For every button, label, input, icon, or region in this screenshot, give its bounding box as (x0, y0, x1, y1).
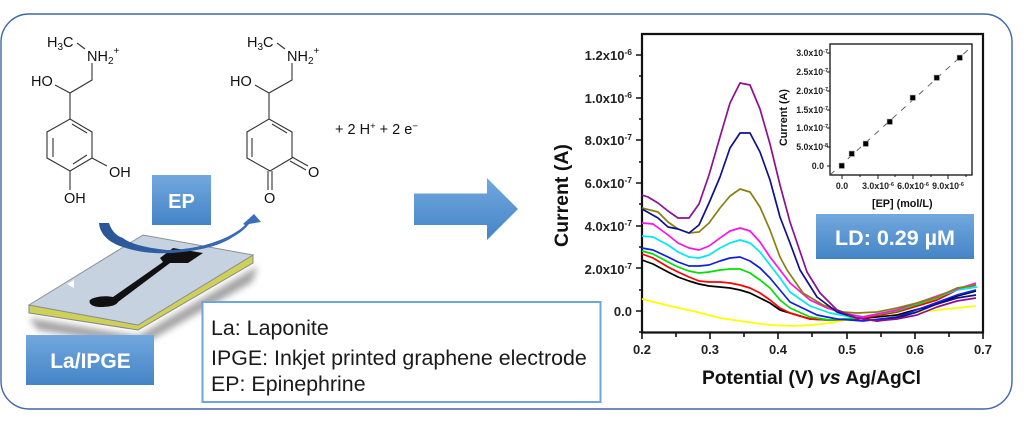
inset data points (839, 55, 962, 168)
molecule: epinephrine: + (114, 46, 120, 57)
voltammogram chart (551, 34, 992, 389)
molecule: epinephrine: C (63, 35, 74, 51)
y tick labels: -7 (624, 218, 632, 228)
y tick labels: 0.0 (614, 304, 632, 319)
curves (642, 83, 977, 326)
x tick labels: 0.3 (701, 342, 719, 357)
inset y labels: -7 (823, 124, 828, 130)
legend box: EP: Epinephrine (211, 372, 366, 396)
y axis title: Current (A) (551, 144, 573, 247)
label: EP: EP (168, 191, 195, 213)
molecule: oxidized epinephrine: 3 (257, 42, 263, 53)
inset x labels: -6 (889, 182, 894, 188)
inset y labels: 2.5x10 (796, 67, 823, 77)
inset x labels: 0.0 (836, 181, 848, 191)
inset ticks (827, 53, 966, 179)
inset y labels: 5.0x10 (796, 142, 823, 152)
inset x labels: -6 (959, 182, 964, 188)
inset x labels: 9.0x10 (932, 181, 959, 191)
inset y labels: -7 (823, 68, 828, 74)
inset y labels: 1.5x10 (796, 105, 823, 115)
molecule: oxidized epinephrine: 2 (308, 56, 314, 67)
y tick labels: -7 (624, 132, 632, 142)
y tick labels: -6 (624, 47, 632, 57)
molecule: epinephrine: H (47, 35, 57, 51)
label: detection limit: LD: 0.29 µM (835, 226, 955, 250)
curved arrow (99, 214, 261, 253)
molecule: oxidized epinephrine (230, 35, 320, 207)
inset y labels: 1.0x10 (796, 123, 823, 133)
x tick labels: 0.7 (974, 342, 992, 357)
y tick labels: -7 (624, 175, 632, 185)
inset y labels: -7 (823, 106, 828, 112)
y tick labels: 1.2x10 (585, 48, 624, 63)
reaction products text: + 2 H (335, 122, 370, 138)
molecule: epinephrine: OH (109, 165, 131, 181)
reaction products text: + 2 e (376, 122, 412, 138)
legend box: IPGE: Inkjet printed graphene electrode (211, 346, 587, 370)
label: detection limit (816, 214, 974, 259)
inset y labels: -7 (823, 87, 828, 93)
y tick labels: 1.0x10 (585, 91, 624, 106)
x tick labels (633, 342, 992, 357)
inset calibration plot: [EP] (mol/L) (872, 198, 933, 210)
block arrow (414, 178, 518, 240)
label: La/IPGE (26, 335, 154, 385)
y tick labels: 8.0x10 (585, 133, 624, 148)
molecule: epinephrine (31, 35, 131, 207)
legend box: La: Laponite (211, 316, 329, 340)
molecule: epinephrine: HO (31, 74, 53, 90)
molecule: epinephrine: 3 (57, 42, 63, 53)
inset y labels: -7 (823, 49, 828, 55)
x tick labels: 0.5 (838, 342, 856, 357)
molecule: oxidized epinephrine: O (264, 191, 275, 207)
x axis title: Potential (V) vs Ag/AgCl (702, 368, 921, 389)
molecule: oxidized epinephrine: O (308, 165, 319, 181)
reaction products text: + (370, 121, 376, 132)
y tick labels: 4.0x10 (585, 219, 624, 234)
molecule: oxidized epinephrine: NH (287, 49, 308, 65)
molecule: epinephrine: 2 (108, 56, 114, 67)
inset y labels: 3.0x10 (796, 48, 823, 58)
axes (642, 34, 983, 332)
inset axis titles: Current (A) (778, 89, 790, 146)
inset y labels: 2.0x10 (796, 86, 823, 96)
inset y labels: 0.0 (812, 161, 824, 171)
y tick labels (585, 47, 632, 319)
printed electrode device (29, 235, 258, 346)
label: EP (152, 175, 211, 225)
legend box (202, 302, 600, 402)
inset y labels (796, 48, 828, 171)
reaction products text: − (412, 121, 418, 132)
y tick labels: -7 (624, 261, 632, 271)
inset x labels: -6 (924, 182, 929, 188)
y tick labels: 2.0x10 (585, 262, 624, 277)
y tick labels: -6 (624, 90, 632, 100)
x tick labels: 0.6 (906, 342, 924, 357)
inset x labels (836, 181, 964, 191)
molecule: epinephrine: NH (87, 49, 108, 65)
molecule: oxidized epinephrine: H (247, 35, 257, 51)
x tick labels: 0.2 (633, 342, 651, 357)
y tick labels: 6.0x10 (585, 176, 624, 191)
inset x labels: 6.0x10 (897, 181, 924, 191)
inset calibration plot (778, 44, 972, 210)
molecule: epinephrine: OH (64, 191, 86, 207)
label: La/IPGE: La/IPGE (50, 350, 131, 373)
molecule: oxidized epinephrine: HO (230, 74, 252, 90)
molecule: oxidized epinephrine: C (263, 35, 274, 51)
inset fit line (830, 49, 969, 175)
molecule: oxidized epinephrine: + (314, 46, 320, 57)
inset y labels: -8 (823, 143, 828, 149)
inset x labels: 3.0x10 (862, 181, 889, 191)
x tick labels: 0.4 (769, 342, 788, 357)
